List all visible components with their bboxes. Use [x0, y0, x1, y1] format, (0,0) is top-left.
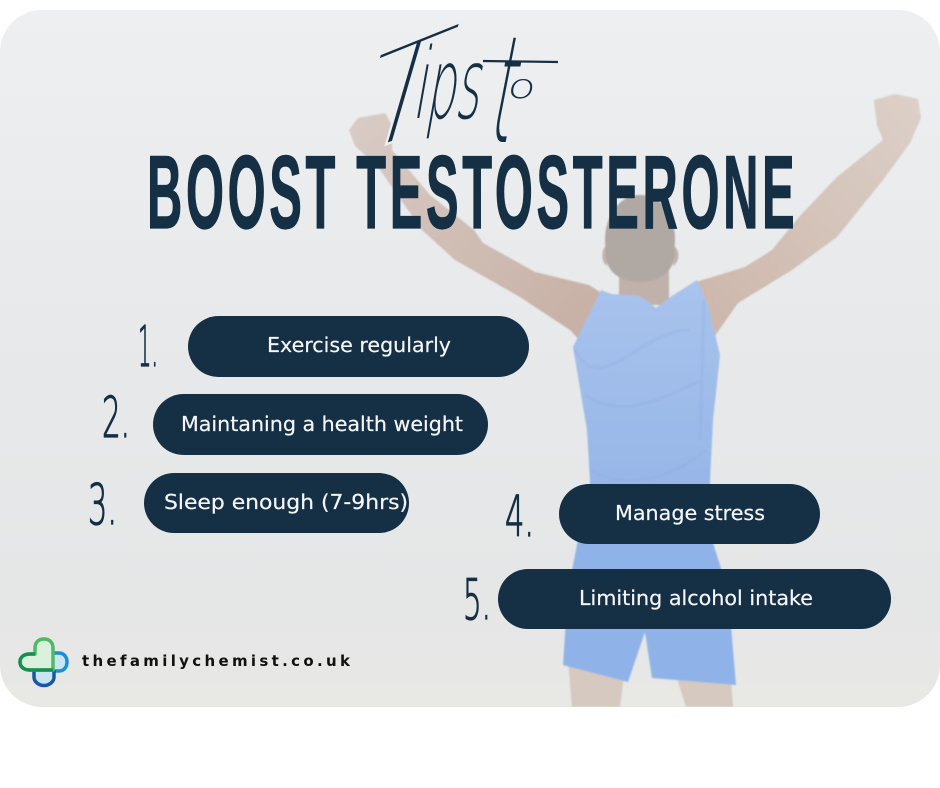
pill 4	[559, 484, 820, 544]
label 5: Limiting alcohol intake	[579, 586, 813, 610]
tip 2	[102, 386, 488, 455]
script letters ips: ips	[408, 28, 494, 142]
number 3: 3.	[88, 473, 117, 538]
number 4: 4.	[505, 485, 534, 550]
man's ears	[602, 246, 678, 266]
man's shorts	[563, 540, 736, 685]
number 5: 5.	[463, 568, 491, 633]
heading: boost testosterone: BOOST TESTOSTERONE	[147, 135, 795, 251]
pill 3	[144, 473, 409, 533]
heading: script line	[336, 0, 558, 195]
tip 1: 1.	[138, 315, 158, 380]
dark green left arm	[20, 654, 53, 670]
blue right arm	[54, 653, 67, 671]
script letter o: o	[505, 66, 540, 106]
label 4: Manage stress	[615, 501, 765, 525]
tip 4	[505, 484, 820, 550]
green heart arms	[20, 639, 53, 670]
label 2: Maintaning a health weight	[181, 412, 463, 436]
man's shirt	[572, 280, 721, 484]
pill 5	[498, 569, 891, 629]
pill 1	[188, 316, 529, 377]
website address: thefamilychemist.co.uk	[82, 652, 351, 670]
man's legs	[568, 666, 734, 707]
tip 3	[88, 473, 409, 538]
logo icon: family chemist cross	[20, 639, 67, 686]
man's head	[605, 195, 675, 282]
pill 2	[153, 394, 488, 455]
man's right arm	[696, 94, 921, 340]
number 2: 2.	[102, 386, 130, 451]
label 1: Exercise regularly	[267, 333, 451, 357]
tip 1	[138, 315, 529, 380]
t crossbar extension	[483, 61, 558, 62]
man's neck	[619, 265, 669, 305]
tip 5	[463, 568, 891, 633]
dark blue bottom arm	[34, 670, 54, 686]
light blue cross arms	[33, 653, 67, 686]
shirt folds	[575, 300, 706, 480]
man's left arm	[349, 113, 600, 345]
label 3: Sleep enough (7-9hrs)	[164, 490, 408, 514]
photo: man with raised arms	[349, 94, 921, 707]
script letter t: t	[480, 5, 535, 177]
